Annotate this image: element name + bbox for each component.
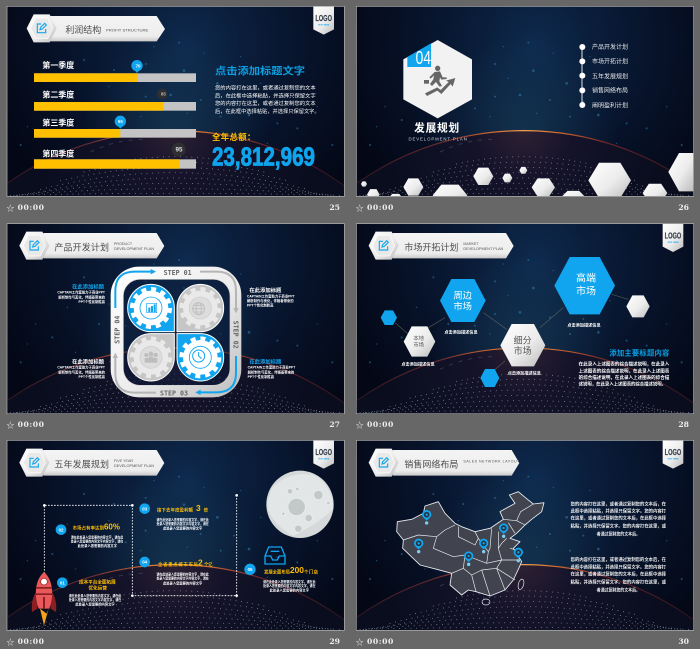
timeline contents list: 产品开发计划	[592, 43, 628, 51]
milestone 05 with inbox icon: 此处录入您需要的内容文字	[270, 588, 310, 593]
milestone 03: 接下去年度盈利额	[157, 506, 194, 513]
hexagon market nodes	[381, 257, 650, 387]
callout: top right	[247, 286, 295, 308]
node captions: 点击添加描述信息	[401, 360, 435, 366]
title banner: five year plan: FIVE YEAR	[114, 459, 133, 463]
logo ribbon: TEXT HERE	[318, 459, 330, 461]
milestone 03	[139, 503, 209, 531]
footer: ☆	[356, 638, 364, 647]
rocket illustration	[32, 572, 56, 625]
milestone 04: 全省重点城市布局	[158, 561, 199, 568]
text block: lower paragraph: 您的内容打在这里，或者通过复制您的文本后，在	[571, 556, 667, 563]
callout: bottom left: CAPTAIN工作室助力于商业PPT	[57, 365, 105, 370]
callout: bottom right: CAPTAIN工作室助力于商业PPT	[248, 365, 295, 370]
callout: bottom left	[57, 357, 106, 379]
milestone 03: 此处录入您需要的内容文字	[163, 526, 203, 531]
milestone 01	[57, 577, 122, 607]
milestone 05 with inbox icon: 处录入您需要的内容文字内容文字，请在	[263, 583, 316, 588]
section hexagon with running icon: 04	[416, 47, 431, 68]
footer	[6, 637, 340, 647]
timeline contents list: 阐明盈利计划	[592, 102, 628, 110]
progress bars by quarter: 65	[118, 119, 123, 124]
node captions	[401, 321, 601, 376]
section hexagon with running icon	[403, 40, 472, 118]
text block: heading and description: 您的内容打在这里，或者通过复制您的文本	[215, 100, 316, 107]
milestone 01: 此处录入您需要的内容文字	[75, 602, 115, 607]
callout: top right: PPT个性化制胜高	[247, 303, 274, 308]
panel: slide 25 profit structure	[6, 6, 344, 213]
callout: bottom left: 在此添加标题	[72, 357, 105, 365]
callout: bottom right	[248, 357, 295, 379]
milestone 04	[139, 557, 213, 585]
text block: summary: 的综合描述说明，在此录入上述图表的综合描	[579, 374, 670, 381]
dashed growth path	[43, 494, 238, 597]
panel: slide 28 market development plan	[356, 224, 694, 430]
milestone 05 with inbox icon: 05	[248, 567, 253, 572]
footer: ☆	[6, 638, 14, 647]
milestone 05 with inbox icon: 个门店	[304, 569, 319, 576]
footer: ☆	[6, 204, 14, 213]
logo ribbon	[313, 7, 334, 35]
milestone 02: 60%	[104, 521, 121, 531]
decorative white hexagons	[361, 153, 693, 206]
hexagon market nodes: 市场	[453, 301, 472, 312]
hexagon market nodes: 市场	[514, 345, 532, 356]
footer: 27	[329, 420, 340, 429]
footer: 00:00	[18, 203, 44, 212]
progress bars by quarter	[34, 60, 196, 169]
text block: upper paragraph	[571, 500, 667, 537]
milestone 01: 成本平台全面拓展	[79, 579, 116, 586]
annual total	[212, 132, 315, 171]
text block: lower paragraph: 在这里，或者通过复制您的文本后，在此框中选择	[571, 570, 667, 577]
progress bars by quarter: 第三季度	[42, 117, 74, 127]
footer: ☆	[356, 204, 364, 213]
footer	[356, 420, 689, 430]
hexagon market nodes: 市场	[413, 341, 424, 349]
progress bars by quarter: 第四季度	[42, 148, 74, 158]
milestone 05 with inbox icon: 发展全面布局	[264, 569, 291, 576]
milestone 02: 市场占有率达到	[73, 524, 105, 531]
progress bars by quarter: 第二季度	[42, 89, 74, 99]
milestone 03: 03	[142, 506, 148, 511]
footer	[356, 203, 689, 213]
milestone 05 with inbox icon: 请在此处录入您需要的内容文字，请在此	[263, 579, 316, 584]
milestone 02: 02	[59, 527, 64, 532]
panel: slide 26 development plan	[356, 6, 694, 213]
title banner: market development: MARKET	[463, 242, 479, 246]
title banner: market development: DEVELOPMENT PLAN	[463, 247, 504, 251]
milestone 05 with inbox icon	[244, 547, 319, 593]
logo ribbon: TEXT HERE	[667, 459, 679, 461]
milestone 01: 优化运营	[88, 585, 107, 592]
progress bars by quarter: 95	[175, 147, 183, 154]
text block: heading and description	[215, 64, 320, 115]
quadrants with gears	[128, 284, 174, 332]
milestone 05 with inbox icon: 200	[290, 565, 304, 575]
title banner: five year plan: DEVELOPMENT PLAN	[114, 464, 154, 468]
logo ribbon	[663, 224, 683, 252]
footer: 26	[678, 203, 689, 212]
milestone 02	[56, 521, 124, 548]
timeline contents list: 销售网络布局	[592, 87, 628, 95]
title banner: five year plan	[19, 449, 164, 477]
step cycle diagram: STEP 01	[164, 269, 192, 277]
logo ribbon: TEXT HERE	[318, 25, 330, 27]
text block: upper paragraph: 粘贴，并选择只保留文字。您的内容打在这里，或	[571, 523, 667, 530]
footer: 28	[678, 420, 689, 429]
title banner: product development: PRODUCT	[114, 242, 133, 246]
text block: upper paragraph: 者通过复制您的文本后。	[597, 530, 640, 537]
callout: bottom right: 在此添加标题	[249, 357, 282, 365]
text block: upper paragraph: 在这里，或者通过复制您的文本后，在此框中选择	[571, 515, 667, 522]
step cycle diagram: STEP 02	[232, 321, 240, 349]
milestone 04: 处录入您需要的内容文字内容文字，请在	[156, 576, 209, 581]
progress bars by quarter: 85	[161, 92, 166, 97]
node captions: 点击添加描述信息	[508, 370, 541, 376]
hexagon market nodes: 市场	[576, 285, 596, 298]
footer	[6, 420, 340, 430]
milestone 01: 01	[60, 580, 65, 585]
connecting lines	[395, 294, 628, 379]
milestone 03: 3	[196, 503, 201, 513]
panel: slide 30 sales network layout	[356, 440, 694, 647]
footer: 00:00	[18, 637, 44, 646]
arrows	[115, 272, 236, 393]
title banner: profit structure: PROFIT STRUCTURE	[106, 28, 149, 32]
logo ribbon: TEXT HERE	[667, 242, 679, 244]
callout: top right: CAPTAIN工作室助力于商业PPT	[247, 293, 295, 298]
text block: heading and description: 您的内容打在这里，或者通过复制您的文本	[215, 85, 316, 92]
text block: summary: 在此录入上述图表的综合描述说明，在此录入	[579, 361, 670, 368]
callout: top left	[57, 282, 106, 304]
title banner: profit structure: 利润结构	[65, 24, 101, 35]
text block: summary: 上述图表的综合描述说明，在此录入上述图表	[579, 367, 670, 374]
footer: 00:00	[367, 637, 393, 646]
callout: top left: PPT个性化制胜高	[79, 299, 106, 304]
node captions: 点击添加描述信息	[567, 321, 601, 327]
callout: bottom right: PPT个性化制胜高	[248, 374, 275, 379]
milestone 03: 请在此处录入您需要的内容文字，请在此	[156, 517, 209, 522]
milestone 04: 04	[142, 560, 148, 565]
logo ribbon	[313, 441, 334, 469]
hexagon market nodes: 周边	[453, 291, 473, 301]
hexagon market nodes: 细分	[514, 334, 532, 345]
footer	[356, 637, 689, 647]
milestone 02: 此处录入您需要的内容文字	[78, 543, 118, 548]
footer: 30	[678, 637, 689, 646]
title banner: product development: DEVELOPMENT PLAN	[114, 247, 154, 251]
title banner: five year plan: 五年发展规划	[54, 458, 109, 469]
footer: 00:00	[367, 420, 393, 429]
timeline contents list	[579, 43, 628, 110]
callout: bottom left: 解析制作与美化，伴随着带来的	[58, 369, 106, 374]
footer: ☆	[356, 421, 364, 430]
annual total: 23,812,969	[212, 141, 315, 171]
text block: lower paragraph: 者通过复制您的文本后。	[597, 586, 640, 593]
timeline contents list: 五年发展规划	[592, 72, 628, 80]
milestone 04: 此处录入您需要的内容文字	[163, 580, 203, 585]
milestone 01: 请在此处录入您需要的内容文字，请在此	[69, 593, 122, 598]
section title: 发展规划	[414, 122, 459, 135]
title banner: product development	[19, 232, 164, 260]
title banner: profit structure	[27, 14, 165, 42]
milestone 02: 请在此处录入您需要的内容文字，请在此	[71, 535, 124, 540]
node captions: 点击添加描述信息	[444, 328, 478, 334]
moon illustration	[266, 471, 334, 538]
text block: upper paragraph: 您的内容打在这里，或者通过复制您的文本后，在	[571, 500, 667, 507]
timeline contents list: 市场开拓计划	[592, 57, 628, 65]
map of China with location pins	[397, 492, 544, 605]
section title: DEVELOPMENT PLAN	[408, 137, 467, 142]
step cycle diagram: STEP 03	[160, 389, 188, 397]
milestone 04: 个亿	[204, 561, 213, 568]
footer: ☆	[6, 421, 14, 430]
text block: upper paragraph: 此框中选择粘贴，并选择只保留文字。您的内容打	[571, 508, 667, 515]
logo ribbon: LOGO	[315, 447, 332, 457]
footer: 29	[329, 637, 340, 646]
footer: 00:00	[18, 420, 44, 429]
progress bars by quarter: 70	[136, 63, 141, 68]
milestone 03: 处录入您需要的内容文字内容文字，请在	[156, 521, 209, 526]
logo ribbon: LOGO	[665, 447, 682, 457]
callout: top right: 解析制作与美化，伴随着带来的	[247, 298, 294, 303]
text block: heading and description: 后，在此框中选择粘贴，并选择只保留文字。	[215, 108, 320, 115]
text block: lower paragraph: 此框中选择粘贴，并选择只保留文字。您的内容打	[571, 563, 667, 570]
hexagon market nodes: 高端	[576, 272, 596, 285]
section title	[408, 122, 467, 142]
step cycle diagram	[111, 267, 241, 397]
text block: heading and description: 点击添加标题文字	[215, 64, 305, 77]
footer: 00:00	[367, 203, 393, 212]
footer	[6, 203, 340, 213]
title banner: sales network: 销售网络布局	[404, 458, 458, 469]
text block: heading and description: 后，在此框中选择粘贴，并选择只保留文字	[215, 92, 316, 99]
callout: bottom right: 解析制作与美化，伴随着带来的	[248, 369, 295, 374]
logo ribbon: LOGO	[665, 230, 682, 240]
text block: summary	[579, 348, 670, 388]
panel: slide 27 product development plan	[6, 224, 344, 430]
milestone 04: 请在此处录入您需要的内容文字，请在此	[156, 572, 209, 577]
milestone 01: 处录入您需要的内容文字内容文字，请在	[69, 597, 122, 602]
annual total: 全年总额：	[212, 132, 255, 142]
title banner: sales network: SALES NETWORK LAYOUT	[463, 460, 520, 464]
callout: top left: CAPTAIN工作室助力于商业PPT	[57, 290, 105, 295]
title banner: market development	[369, 232, 514, 260]
callout: top left: 解析制作与美化，伴随着带来的	[58, 294, 106, 299]
logo ribbon	[663, 441, 683, 469]
milestone 04: 2	[198, 558, 203, 568]
milestone 02: 处录入您需要的内容文字内容文字，请在	[71, 539, 124, 544]
text block: lower paragraph: 粘贴，并选择只保留文字。您的内容打在这里，或	[571, 578, 667, 585]
text block: summary: 述说明，在此录入上述图表的综合描述说明。	[579, 381, 666, 388]
title banner: market development: 市场开拓计划	[404, 241, 458, 252]
hexagon market nodes: 本地	[413, 334, 425, 342]
text block: lower paragraph	[571, 556, 667, 593]
title banner: sales network	[369, 449, 520, 477]
footer: 25	[329, 203, 340, 212]
text block: summary: 添加主要标题内容	[609, 348, 670, 357]
title banner: product development: 产品开发计划	[54, 241, 109, 252]
callout: top left: 在此添加标题	[72, 282, 105, 290]
panel: slide 29 five year plan	[6, 440, 344, 647]
milestone 03: 倍	[204, 506, 209, 513]
progress bars by quarter: 第一季度	[42, 60, 74, 70]
callout: top right: 在此添加标题	[249, 286, 282, 294]
step cycle diagram: STEP 04	[113, 316, 121, 344]
callout: bottom left: PPT个性化制胜高	[79, 374, 106, 379]
logo ribbon: LOGO	[315, 13, 332, 23]
